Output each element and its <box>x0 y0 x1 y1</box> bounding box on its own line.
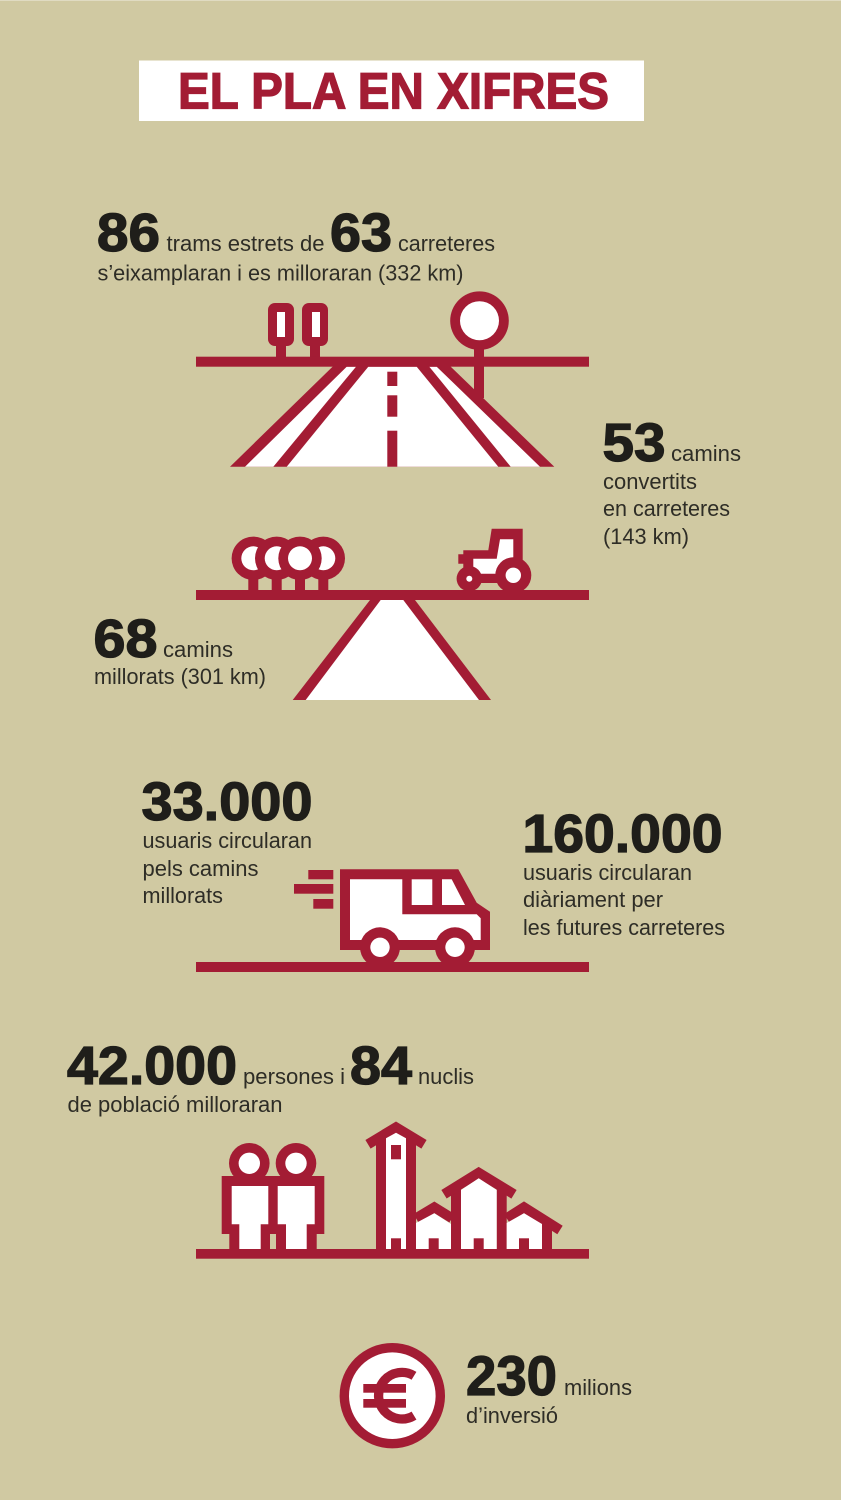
text block: 33.000 usuaris: pels camins <box>142 856 258 881</box>
text block: 42.000 persones i 84 nuclis: nuclis <box>418 1064 474 1089</box>
ground line <box>196 1249 589 1259</box>
illustration: delivery van on road <box>196 869 589 972</box>
horizon line <box>196 357 589 367</box>
icon: two people <box>222 1143 324 1252</box>
text block: 42.000 persones i 84 nuclis: de població milloraran <box>68 1092 282 1117</box>
road line <box>196 962 589 972</box>
text block: 160.000 usuaris: diàriament per <box>523 887 663 912</box>
title: EL PLA EN XIFRES <box>178 62 609 120</box>
text block: 33.000 usuaris: usuaris circularan <box>142 828 312 853</box>
text block: 86 trams estrets de 63 carreteres: s’eixamplaran i es milloraran (332 km) <box>98 260 464 286</box>
text block: 86 trams estrets de 63 carreteres <box>97 203 495 286</box>
text block: 33.000 usuaris: 33.000 <box>142 772 312 832</box>
icon: bell tower <box>368 1127 424 1253</box>
text block: 42.000 persones i 84 nuclis: 42.000 <box>67 1036 237 1096</box>
road surface <box>293 600 491 700</box>
text block: 42.000 persones i 84 nuclis: 84 <box>350 1036 412 1096</box>
horizon line <box>196 590 589 600</box>
text block: 160.000 usuaris: les futures carreteres <box>523 915 725 940</box>
illustration: wide road with trees and round sign <box>196 291 589 467</box>
icon: van <box>340 869 490 967</box>
text block: 160.000 usuaris: usuaris circularan <box>523 860 692 885</box>
text block: 86 trams estrets de 63 carreteres: trams estrets de <box>166 231 324 256</box>
road surface <box>230 366 554 467</box>
text block: 33.000 usuaris: millorats <box>142 883 223 908</box>
text block: 230 milions d'inversió: milions <box>564 1375 632 1400</box>
icon: speed lines <box>294 870 333 909</box>
illustration: narrow road with trees and tractor <box>196 529 589 700</box>
icon: four trees <box>232 537 345 592</box>
text block: 160.000 usuaris <box>522 804 725 940</box>
text block: 53 camins convertits en carreteres: (143 km) <box>603 524 689 549</box>
text block: 230 milions d'inversió: d’inversió <box>466 1403 558 1428</box>
text block: 42.000 persones i 84 nuclis: persones i <box>243 1064 345 1089</box>
text block: 68 camins millorats: 68 <box>94 609 158 669</box>
text block: 230 milions d'inversió <box>466 1344 632 1428</box>
icon: round sign tree <box>450 291 509 398</box>
text block: 86 trams estrets de 63 carreteres: 86 <box>97 203 160 263</box>
text block: 160.000 usuaris: 160.000 <box>522 804 722 864</box>
text block: 53 camins convertits en carreteres: en carreteres <box>603 496 730 521</box>
text block: 230 milions d'inversió: 230 <box>466 1344 557 1407</box>
icon: two roadside trees <box>268 303 328 358</box>
icon: houses <box>416 1173 560 1252</box>
text block: 68 camins millorats: camins <box>163 637 233 662</box>
text block: 42.000 persones i 84 nuclis <box>67 1036 474 1117</box>
text block: 53 camins convertits en carreteres: convertits <box>603 469 697 494</box>
text block: 86 trams estrets de 63 carreteres: carreteres <box>398 231 495 256</box>
text block: 68 camins millorats <box>94 609 266 689</box>
text block: 86 trams estrets de 63 carreteres: 63 <box>330 203 392 263</box>
text block: 53 camins convertits en carreteres: 53 <box>602 413 666 473</box>
icon: tractor <box>457 529 531 593</box>
illustration: people and village <box>196 1127 589 1259</box>
text block: 53 camins convertits en carreteres <box>602 413 741 549</box>
text block: 68 camins millorats: millorats (301 km) <box>94 664 266 689</box>
text block: 33.000 usuaris <box>142 772 312 908</box>
text block: 53 camins convertits en carreteres: camins <box>671 441 741 466</box>
icon: euro coin <box>340 1343 445 1448</box>
